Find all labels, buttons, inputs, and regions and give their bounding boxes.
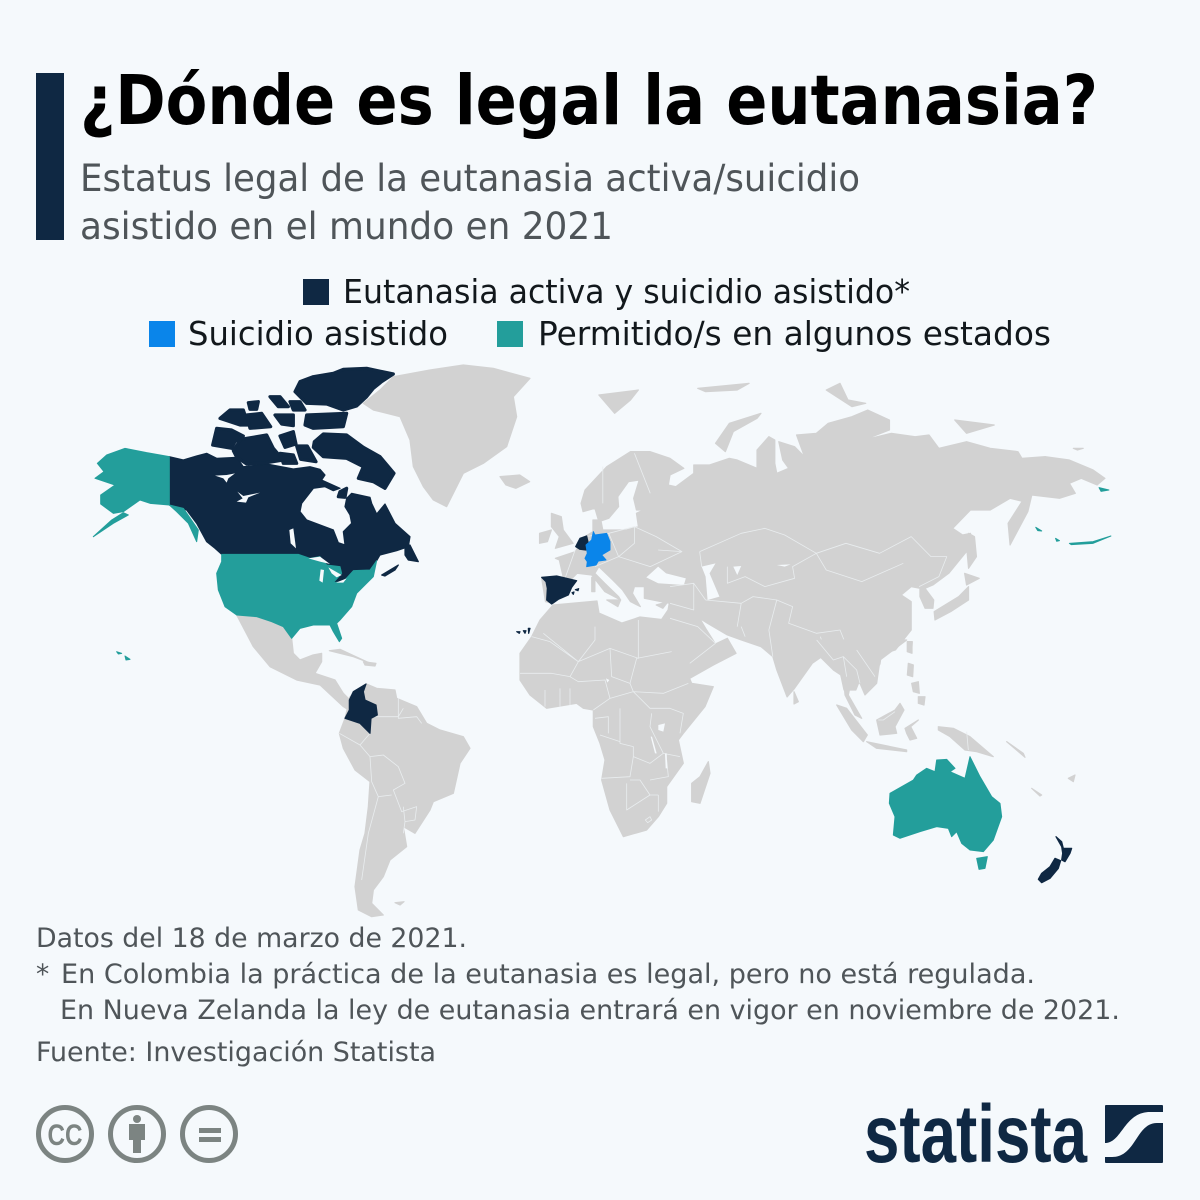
map: inland seas — [646, 563, 791, 600]
map: African borders — [520, 620, 688, 823]
map: Eurasian borders — [547, 453, 947, 663]
map: South America — [339, 684, 470, 917]
map: Southeast Asian borders — [817, 640, 968, 750]
subtitle: asistido en el mundo en 2021 — [80, 205, 613, 248]
logo mark — [1105, 1105, 1163, 1163]
footnotes: * — [36, 959, 49, 990]
legend — [149, 272, 1051, 353]
map: Western Europe highlights — [542, 532, 610, 604]
icon: creative commons: CC — [48, 1119, 82, 1152]
map: Canary Islands — [517, 628, 530, 633]
map: Netherlands and Belgium — [576, 536, 588, 550]
map: Falkland Islands — [395, 902, 404, 905]
map: Madagascar — [692, 762, 710, 803]
map: South American borders — [339, 698, 422, 880]
footnotes — [36, 923, 1120, 1068]
map: Canadian lakes — [215, 473, 296, 548]
world map — [93, 365, 1111, 917]
map: Cuba and Hispaniola — [329, 649, 376, 666]
map: Eurasia — [500, 383, 1111, 697]
footnotes: En Nueva Zelanda la ley de eutanasia entrará en vigor en noviembre de 2021. — [60, 995, 1120, 1026]
map: Arctic Archipelago — [213, 368, 394, 497]
map: Sakhalin, Kamchatka and Japan — [874, 495, 1032, 665]
footnotes: En Colombia la práctica de la eutanasia es legal, pero no está regulada. — [61, 959, 1035, 990]
legend item: active euthanasia and assisted suicide: Eutanasia activa y suicidio asistido* — [343, 272, 910, 311]
license icons — [38, 1108, 236, 1160]
icon: attribution — [110, 1108, 164, 1160]
subtitle: Estatus legal de la eutanasia activa/suicidio — [80, 157, 860, 200]
map: Africa and South America — [329, 601, 713, 917]
map: Scandinavia and Finland — [581, 452, 684, 522]
footnotes: Datos del 18 de marzo de 2021. — [36, 923, 467, 954]
map: United States and Alaska in teal — [93, 448, 377, 660]
map: Newfoundland and Nova Scotia — [405, 545, 418, 562]
map: Africa — [520, 601, 713, 837]
map: Mediterranean islands — [592, 577, 668, 608]
map: Balearic Islands — [572, 589, 579, 594]
legend item: allowed in some states: Permitido/s en algunos estados — [538, 314, 1051, 353]
map: Great Lakes — [308, 557, 347, 583]
map: UK and Ireland — [540, 513, 573, 548]
icon: no derivatives — [182, 1108, 236, 1160]
map: South and Southeast Asia — [794, 640, 1075, 796]
footnotes: Fuente: Investigación Statista — [36, 1037, 436, 1068]
map: Mexico and Central America — [237, 615, 373, 718]
map: Canada mainland — [169, 453, 410, 583]
map: Canada — [169, 368, 418, 583]
map: Spain — [542, 576, 577, 604]
map: Europe and Asia mainland — [542, 410, 1105, 697]
icon: creative commons — [38, 1108, 92, 1160]
map: Aleutian Islands in teal — [1036, 488, 1111, 545]
map: Greenland — [363, 365, 530, 507]
map: African lakes — [606, 678, 667, 768]
map: Colombia — [345, 684, 377, 733]
map: Southeast Asia and Oceania — [794, 640, 1075, 883]
map: arctic islands — [500, 383, 1083, 488]
statista logo — [864, 1089, 1163, 1180]
map: New Zealand — [1038, 837, 1072, 883]
map: Germany and Switzerland in blue — [585, 532, 610, 567]
logo wordmark: statista — [864, 1089, 1088, 1180]
legend item: assisted suicide: Suicidio asistido — [188, 314, 448, 353]
accent bar — [36, 73, 64, 240]
subtitle — [80, 157, 860, 248]
map: North America — [93, 365, 530, 718]
map: Australia — [889, 757, 1002, 869]
